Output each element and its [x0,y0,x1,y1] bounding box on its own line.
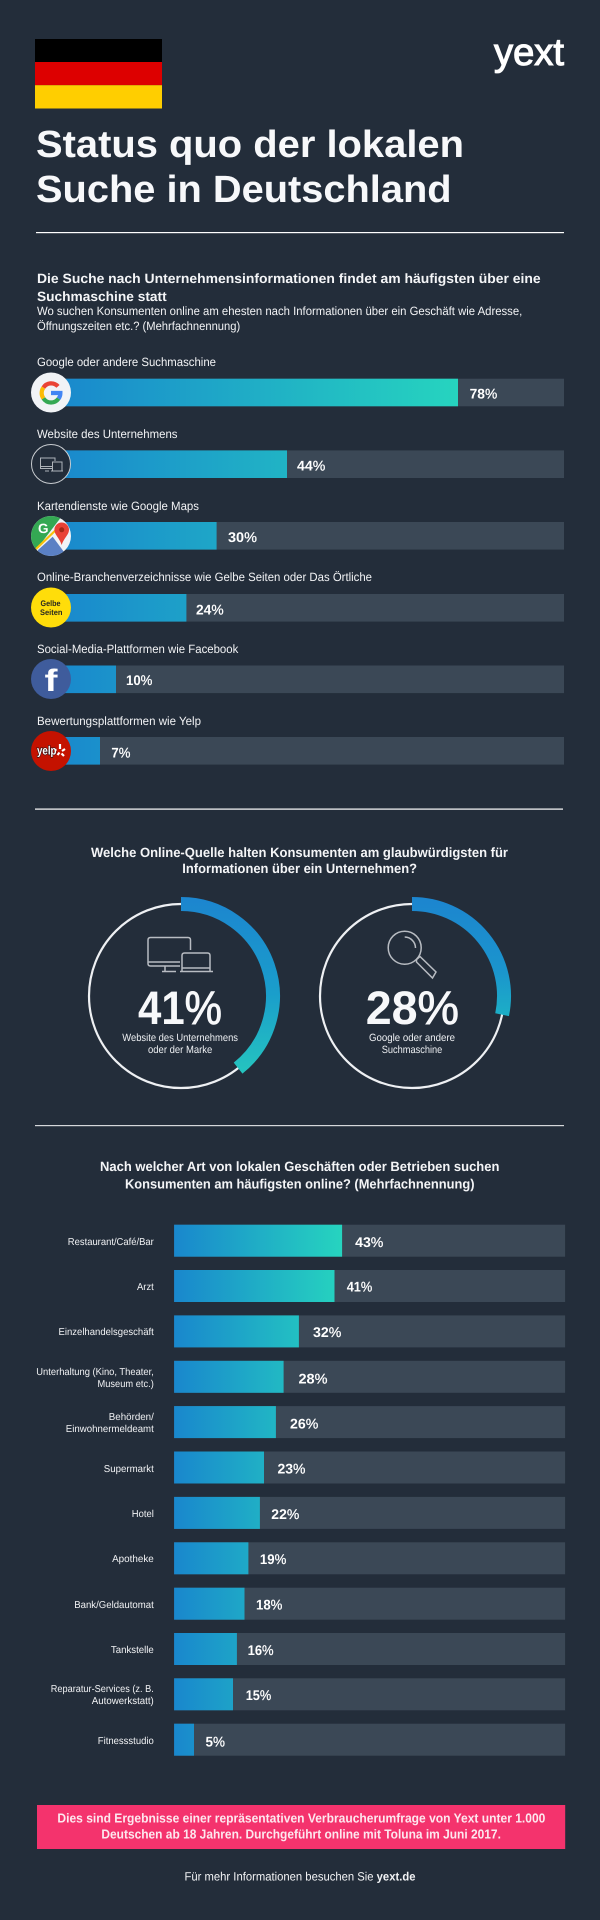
bar row: Website des Unternehmens 44%: 44% [297,457,325,473]
bar row: Kartendienste wie Google Maps 30% [31,499,564,556]
icon: Yelp [31,731,71,771]
bar row: Social-Media-Plattformen 10%: Social-Media-Plattformen wie Facebook [37,642,239,656]
bar row: Fitnessstudio 5%: 5% [206,1733,225,1749]
donut: 28% Google: Suchmaschine [382,1044,442,1056]
title [36,124,464,211]
bar row: Arzt 41%: 41% [347,1279,372,1295]
bar row: Google oder andere Suchmaschine 78%: Google oder andere Suchmaschine [37,355,216,369]
donut: 41% Website [89,904,273,1088]
bar row: Social-Media-Plattformen 10% [31,642,564,699]
bar row: Google oder andere Suchmaschine 78%: 78% [470,386,497,402]
bar row: Bank/Geldautomat 18% [74,1588,565,1620]
text block: survey question: Öffnungszeiten etc.? (Mehrfachnennung) [37,319,240,333]
heading: search section: Suchmaschine statt [37,289,167,304]
donut: 28% Google [320,904,504,1088]
bar row: Tankstelle 16% [111,1633,565,1665]
icon: Yelp: yelp [37,744,56,758]
bar row: Restaurant/Café/Bar 43%: Restaurant/Café/Bar [68,1237,154,1248]
heading: search section [37,271,541,304]
bar row: Kartendienste wie Google Maps 30%: Kartendienste wie Google Maps [37,499,199,513]
bar row: Supermarkt 23% [104,1452,565,1484]
bar row: Supermarkt 23%: 23% [278,1460,306,1476]
bar row: Unterhaltung 28%: 28% [298,1370,328,1386]
bar row: Einzelhandelsgeschäft 32%: Einzelhandelsgeschäft [58,1327,154,1338]
bar row: Behörden 26% [66,1406,565,1438]
callout: survey methodology [37,1805,565,1849]
bar row: Arzt 41%: Arzt [137,1282,154,1293]
icon: Google G [31,372,71,412]
bar row: Hotel 22%: 22% [271,1506,299,1522]
heading: credibility section: Welche Online-Quelle halten Konsumenten am glaubwürdigsten für [91,845,509,860]
bar row: Apotheke 19%: 19% [260,1551,286,1567]
bar row: Restaurant/Café/Bar 43% [68,1225,565,1257]
icon: Facebook: f [44,663,58,698]
bar row: Tankstelle 16%: Tankstelle [111,1645,154,1656]
bar row: Fitnessstudio 5% [98,1724,565,1756]
icon: Facebook [31,659,71,699]
icon: Google Maps: G [38,521,49,536]
bar row: Behörden 26%: Einwohnermeldeamt [66,1424,154,1435]
bar row: Supermarkt 23%: Supermarkt [104,1464,154,1475]
bar row: Reparatur-Services 15%: Autowerkstatt) [92,1696,154,1707]
bar row: Apotheke 19%: Apotheke [112,1554,154,1565]
bar row: Bank/Geldautomat 18%: 18% [256,1597,282,1613]
bar row: Fitnessstudio 5%: Fitnessstudio [98,1736,154,1747]
logo: yext: yext [494,32,564,74]
heading: business types section [100,1159,499,1191]
donut: 41% Website: Website des Unternehmens [122,1032,238,1044]
text block: survey question [37,304,522,333]
icon: German flag [35,39,162,108]
icon: monitor and laptop [148,938,213,972]
icon: devices [32,444,70,484]
bar row: Website des Unternehmens 44% [32,427,564,484]
callout: survey methodology: Deutschen ab 18 Jahren. Durchgeführt online mit Toluna im Juni 2017. [101,1827,501,1842]
bar row: Online-Branchenverzeichnisse 24%: Online-Branchenverzeichnisse wie Gelbe Seiten oder Das Örtliche [37,570,372,584]
icon: magnifying glass [388,931,436,978]
bar row: Einzelhandelsgeschäft 32%: 32% [313,1324,341,1340]
title: Suche in Deutschland [36,169,452,211]
bar row: Reparatur-Services 15%: Reparatur-Services (z. B. [51,1684,154,1695]
bar row: Bewertungsplattformen wie Yelp 7% [31,714,564,771]
bar row: Google oder andere Suchmaschine 78% [31,355,564,412]
bar row: Arzt 41% [137,1270,565,1302]
bar row: Behörden 26%: 26% [290,1415,318,1431]
bar row: Hotel 22%: Hotel [132,1509,154,1520]
bar row: Apotheke 19% [112,1542,565,1574]
bar row: Reparatur-Services 15% [51,1678,565,1710]
bar row: Tankstelle 16%: 16% [248,1642,274,1658]
bar row: Bewertungsplattformen wie Yelp 7%: 7% [111,744,130,760]
icon: Google Maps [31,516,71,556]
bar row: Behörden 26%: Behörden/ [109,1412,154,1423]
bar row: Bank/Geldautomat 18%: Bank/Geldautomat [74,1600,154,1611]
donut: 41% Website: oder der Marke [148,1044,212,1056]
bar row: Reparatur-Services 15%: 15% [246,1687,271,1703]
heading: business types section: Konsumenten am häufigsten online? (Mehrfachnennung) [125,1176,474,1191]
bar row: Hotel 22% [132,1497,565,1529]
bar row: Website des Unternehmens 44%: Website des Unternehmens [37,427,178,441]
callout: survey methodology: Dies sind Ergebnisse einer repräsentativen Verbraucherumfrage von Yext unter 1.000 [57,1811,545,1826]
icon: Gelbe Seiten: Gelbe [40,599,61,608]
heading: credibility section: Informationen über ein Unternehmen? [182,861,417,876]
bar row: Social-Media-Plattformen 10%: 10% [126,672,152,688]
bar row: Kartendienste wie Google Maps 30%: 30% [228,529,257,545]
donut: 28% Google: 28% [366,981,459,1034]
bar row: Unterhaltung 28%: Museum etc.) [98,1379,154,1390]
bar row: Einzelhandelsgeschäft 32% [58,1315,565,1347]
bar row: Bewertungsplattformen wie Yelp 7%: Bewertungsplattformen wie Yelp [37,714,201,728]
donut: 41% Website: 41% [138,981,222,1034]
bar row: Restaurant/Café/Bar 43%: 43% [355,1234,383,1250]
bar row: Online-Branchenverzeichnisse 24%: 24% [196,601,224,617]
bar row: Online-Branchenverzeichnisse 24% [31,570,564,628]
bar row: Unterhaltung 28% [36,1361,565,1393]
footer link text: Für mehr Informationen besuchen Sie yext.de [184,1870,416,1884]
icon: Gelbe Seiten: Seiten [40,608,63,617]
text block: survey question: Wo suchen Konsumenten online am ehesten nach Informationen über ein Geschäft wie Adresse, [37,304,522,318]
heading: business types section: Nach welcher Art von lokalen Geschäften oder Betrieben suchen [100,1159,499,1174]
title: Status quo der lokalen [36,124,464,166]
icon: Gelbe Seiten [31,588,71,628]
bar row: Unterhaltung 28%: Unterhaltung (Kino, Theater, [36,1367,154,1378]
heading: search section: Die Suche nach Unternehmensinformationen findet am häufigsten über eine [37,271,541,286]
donut: 28% Google: Google oder andere [369,1032,455,1044]
heading: credibility section [91,845,509,876]
